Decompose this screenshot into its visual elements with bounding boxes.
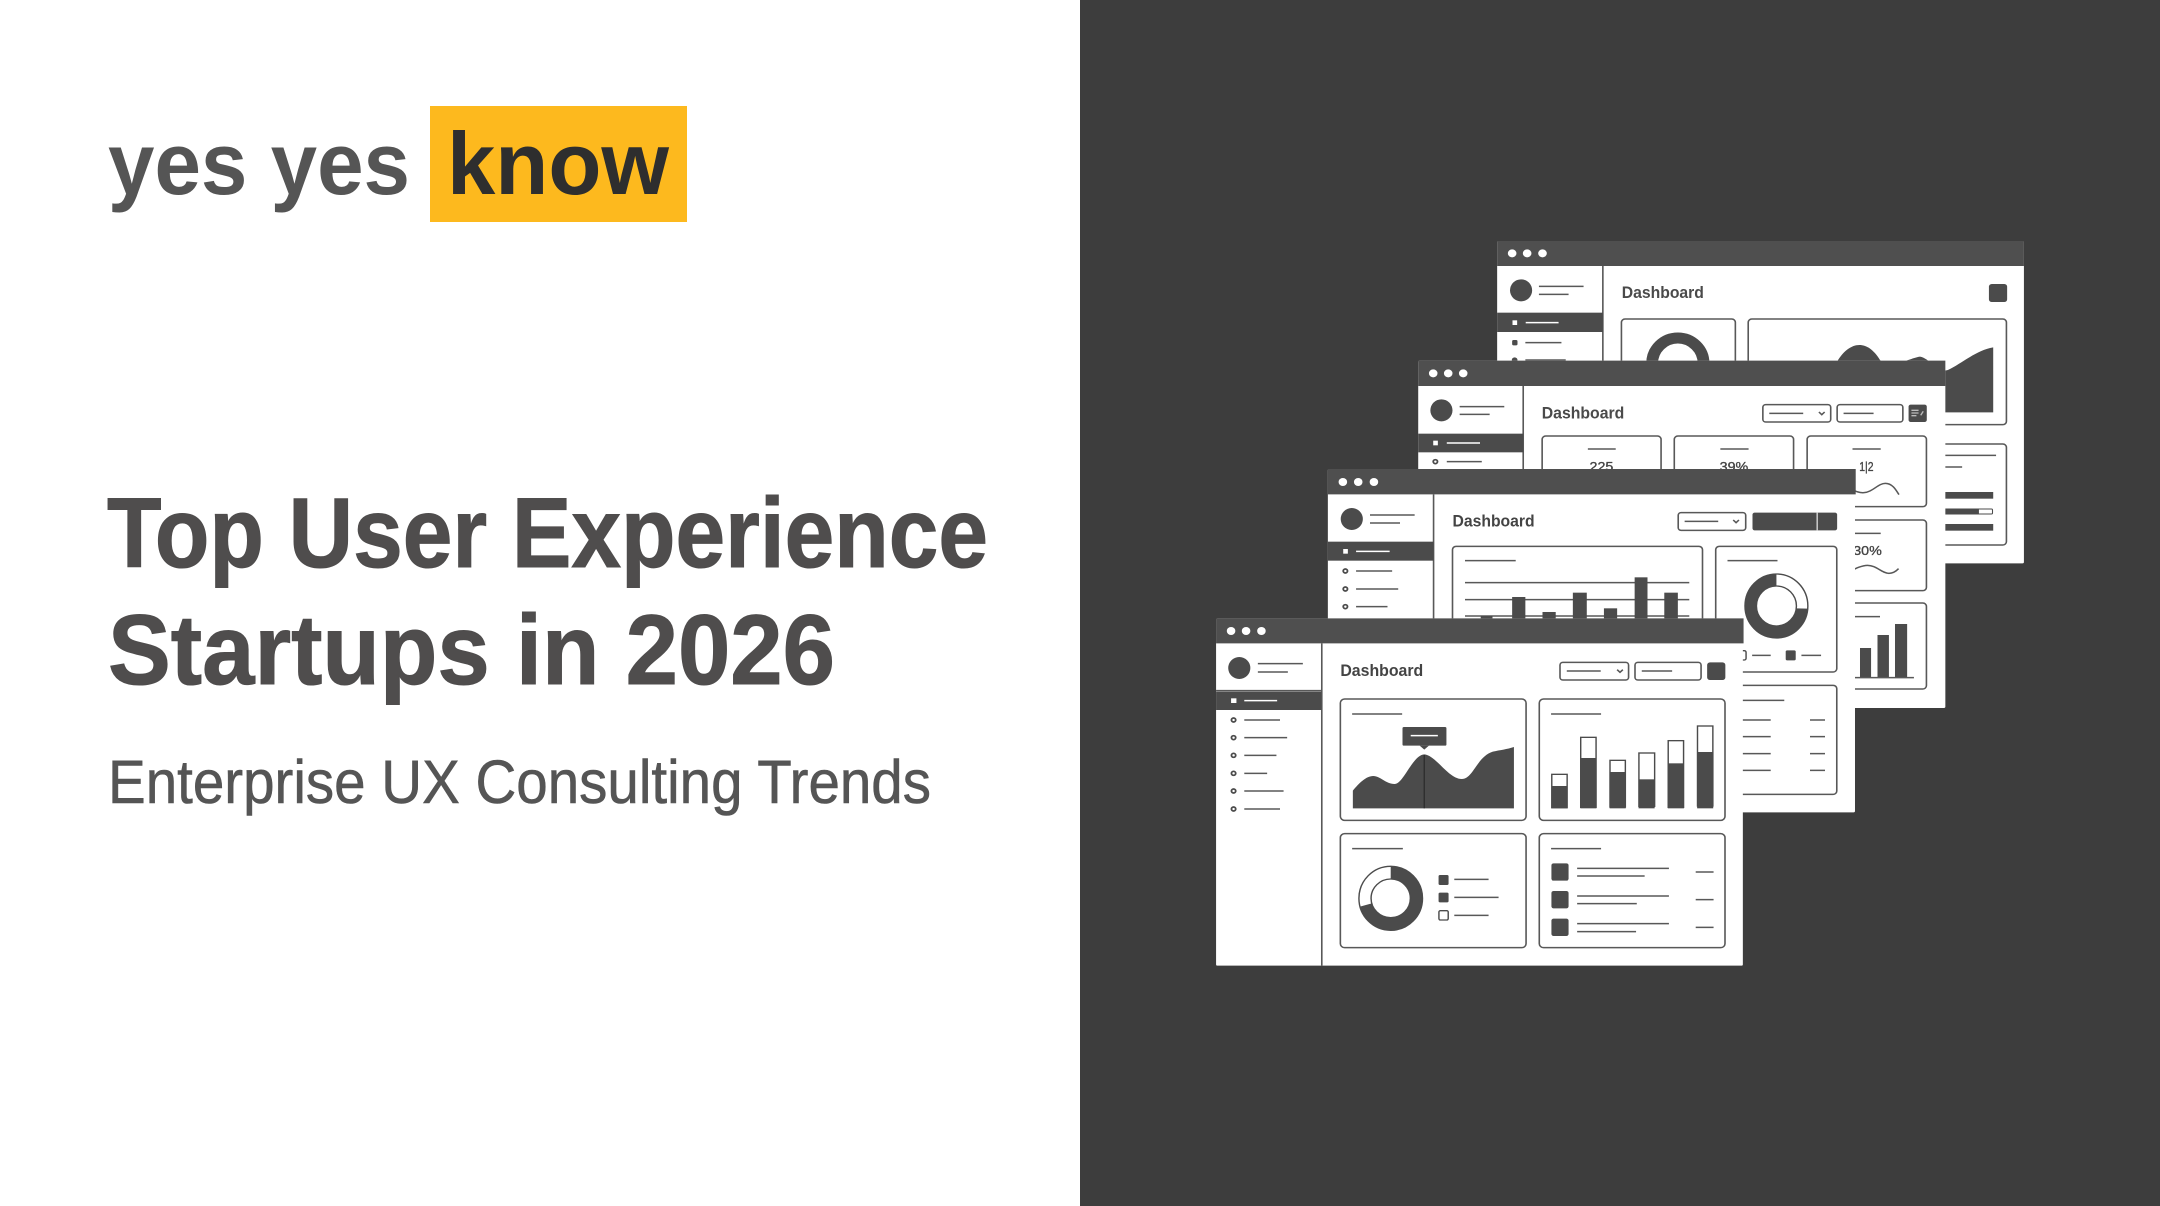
stat card: 225 [1542,436,1661,507]
logo text: know: know [447,114,670,213]
window body [1216,618,1743,966]
sidebar [1418,386,1523,708]
dropdown [1678,513,1746,530]
heading: Dashboard: Dashboard [1542,403,1624,422]
card: bar chart [1807,603,1926,689]
logo highlight box [430,106,687,222]
dashboard window 3 [1418,361,1945,708]
dropdown [1560,662,1629,680]
dashboard window 4 (back) [1497,241,2024,563]
sidebar [1216,643,1322,966]
title [107,477,988,705]
window dots [1227,627,1266,635]
stat card: 39% [1674,436,1794,507]
filter button [1909,405,1927,422]
stat card: 30% with sparkline [1807,520,1926,591]
panel: dark right background [1080,0,2160,1206]
sidebar [1497,266,1603,563]
stat card: 39%: 39% [1720,458,1748,474]
title bar [1216,618,1744,643]
stat card: 1/2 with sparkline: 1|2 [1859,458,1874,474]
card: donut with legend [1340,834,1526,948]
window body [1418,361,1945,708]
dashboard window 1 (front) [1216,618,1744,966]
tooltip [1402,727,1446,750]
card: bar chart with grid [1452,546,1702,673]
dropdown [1763,405,1831,422]
card: area chart [1340,699,1526,820]
heading: Dashboard: Dashboard [1452,511,1535,531]
solid action button [1752,513,1837,530]
sidebar [1328,494,1434,812]
stat card: 30% with sparkline: 30% [1853,542,1882,558]
card: area chart [1748,319,2006,425]
card: list [1716,685,1837,794]
search input [1635,662,1701,680]
legend [1439,875,1499,920]
title line 1: Top User Experience [107,477,988,588]
card: list [1539,834,1725,948]
stat card: 1/2 with sparkline [1807,436,1926,507]
action button [1707,662,1725,680]
logo text: yes yes: yes yes [108,114,410,213]
card: donut [1621,319,1735,429]
window body [1328,469,1855,812]
action button [1989,284,2007,302]
window dots [1429,369,1468,377]
search input [1837,405,1903,422]
window dots [1339,478,1378,486]
card: stacked bar chart [1539,699,1725,820]
logo [108,106,687,222]
title bar [1418,361,1945,386]
subtitle: Enterprise UX Consulting Trends [108,748,931,816]
stat card: 225: 225 [1590,458,1614,474]
card: progress list [1748,444,2006,545]
title bar [1497,241,2024,266]
window dots [1508,249,1547,257]
heading: Dashboard: Dashboard [1622,283,1704,302]
card: donut [1716,546,1837,672]
dashboard window 2 [1328,469,1856,812]
title bar [1328,469,1856,494]
window body [1497,241,2024,563]
title line 2: Startups in 2026 [108,594,835,705]
heading: Dashboard: Dashboard [1340,661,1423,680]
